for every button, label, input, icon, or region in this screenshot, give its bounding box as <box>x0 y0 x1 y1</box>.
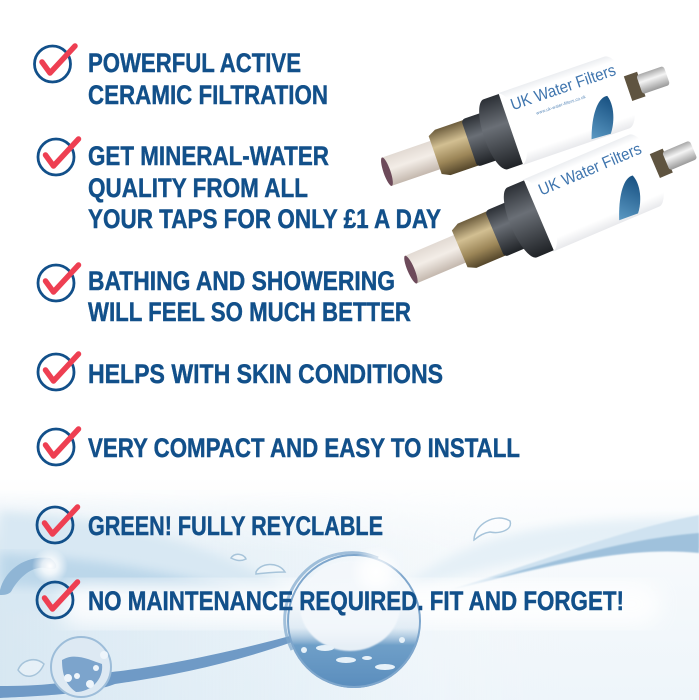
text: CERAMIC FILTRATION <box>88 80 328 110</box>
filter: front unit <box>392 114 699 307</box>
icon: check mark <box>38 265 78 301</box>
filter: rear unit <box>371 39 679 209</box>
left bubble with flare <box>0 548 68 595</box>
background: water scene <box>0 499 699 700</box>
product photo: water filters <box>371 39 699 307</box>
text: YOUR TAPS FOR ONLY £1 A DAY <box>88 204 441 234</box>
item 2: mineral water <box>38 139 441 234</box>
text: GET MINERAL-WATER <box>88 141 329 171</box>
item 4: skin conditions <box>38 354 443 390</box>
icon: check mark <box>38 429 78 465</box>
label text: UK Water Filters <box>536 140 644 199</box>
droplets <box>18 518 510 676</box>
text: WILL FEEL SO MUCH BETTER <box>88 297 411 327</box>
text: VERY COMPACT AND EASY TO INSTALL <box>88 433 520 463</box>
text: POWERFUL ACTIVE <box>88 48 301 78</box>
lower water stream <box>0 636 292 698</box>
icon: check mark <box>37 582 78 618</box>
text: QUALITY FROM ALL <box>88 173 308 203</box>
label text: UK Water Filters <box>508 61 618 114</box>
small bubble <box>51 637 111 697</box>
item 3: bathing and showering <box>38 265 411 327</box>
white glow behind lower text <box>60 582 660 626</box>
text: HELPS WITH SKIN CONDITIONS <box>88 359 443 389</box>
item 6: recyclable <box>37 507 383 543</box>
text: GREEN! FULLY REYCLABLE <box>88 511 383 541</box>
icon: check mark <box>38 139 78 175</box>
icon: check mark <box>38 354 78 390</box>
icon: check mark <box>37 507 78 543</box>
text: BATHING AND SHOWERING <box>88 266 395 296</box>
filter: rear unit: www.uk-water-filters.co.uk <box>535 94 587 116</box>
icon: check mark <box>34 46 75 82</box>
item 5: compact <box>38 429 520 465</box>
big bubble <box>285 546 421 688</box>
item 7: no maintenance <box>37 582 624 618</box>
item 1: ceramic filtration <box>34 46 328 110</box>
